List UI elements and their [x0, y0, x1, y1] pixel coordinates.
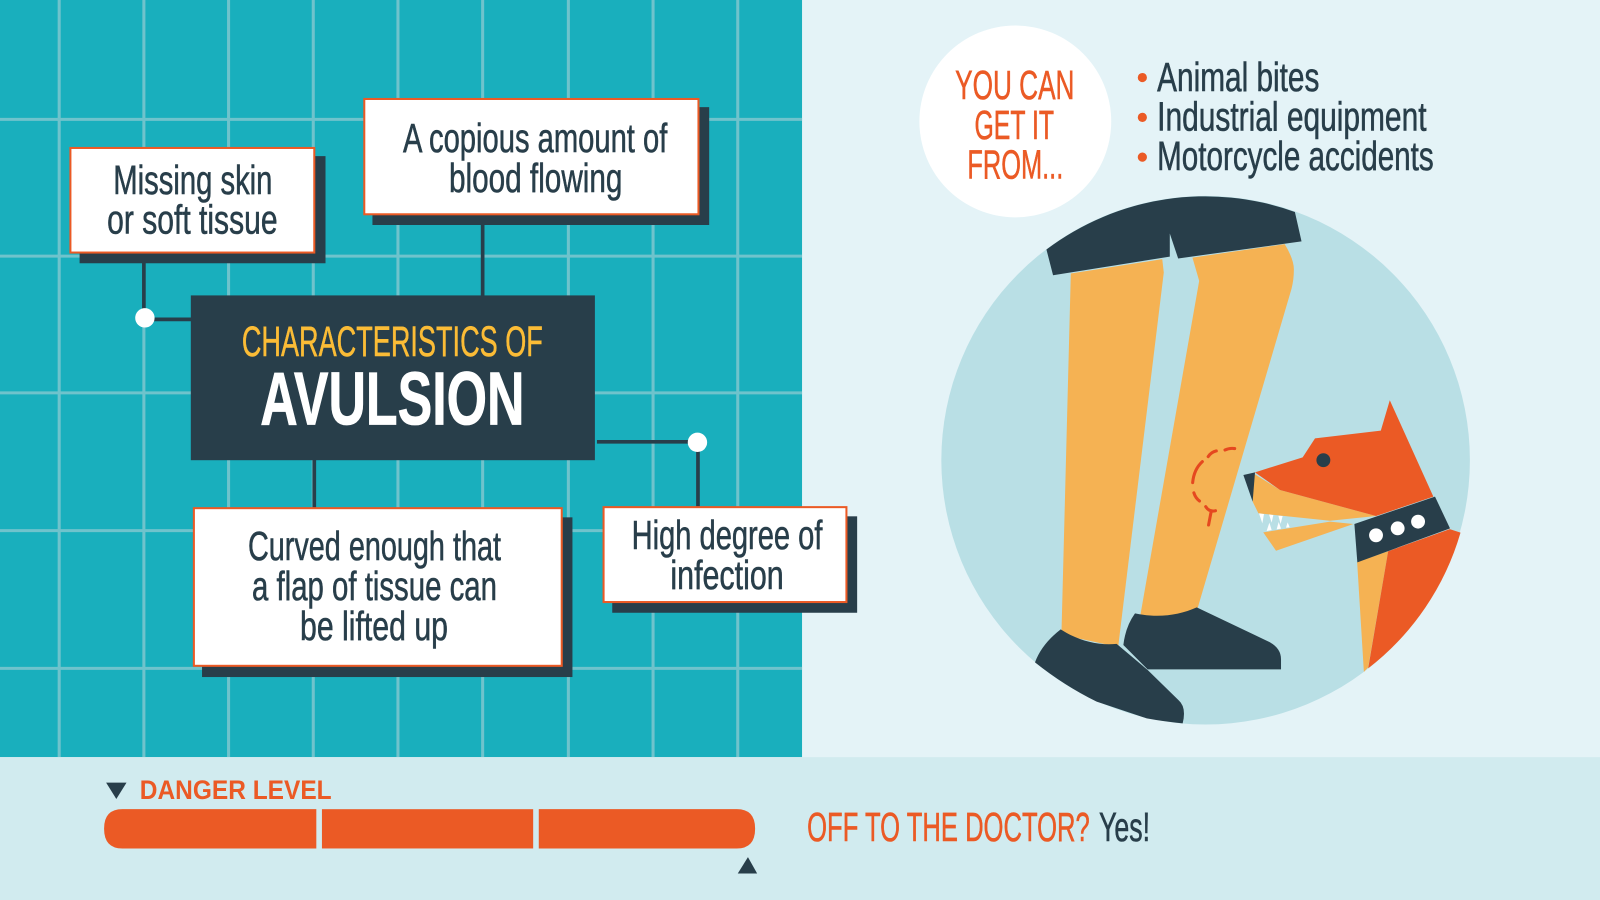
callout: curved flap: be lifted up — [300, 603, 448, 649]
callout: you can get it from: GET IT — [974, 102, 1054, 148]
callout: blood flowing: A copious amount of — [403, 115, 668, 161]
callout: you can get it from — [919, 26, 1111, 217]
callout: infection — [604, 507, 857, 613]
front leg — [1140, 244, 1294, 618]
doctor verdict: Yes! — [1099, 804, 1150, 850]
panel: danger level band — [0, 757, 1600, 900]
panel: characteristics grid background — [0, 0, 802, 757]
back leg — [1061, 259, 1164, 647]
dog nose — [1243, 472, 1255, 502]
title block: CHARACTERISTICS OF — [242, 318, 543, 366]
list of causes: Motorcycle accidents — [1157, 133, 1434, 179]
callout: blood flowing: blood flowing — [449, 155, 622, 201]
illustration: dog biting leg — [941, 196, 1470, 724]
callout: curved flap: Curved enough that — [248, 523, 501, 569]
wound — [1193, 448, 1235, 525]
dog teeth — [1259, 513, 1290, 531]
callout: blood flowing — [364, 99, 709, 225]
callout: infection: infection — [670, 552, 784, 598]
callout: infection: High degree of — [632, 512, 823, 558]
title block — [191, 295, 595, 460]
callout: curved flap: a flap of tissue can — [252, 563, 497, 609]
dog eye — [1316, 453, 1330, 467]
callout: you can get it from: FROM... — [967, 142, 1063, 188]
connector lines and nodes — [135, 219, 707, 510]
callout: curved flap — [194, 508, 572, 677]
front shoe — [1123, 607, 1281, 669]
danger level marker — [738, 857, 757, 873]
doctor verdict: OFF TO THE DOCTOR? — [807, 804, 1090, 850]
callout: you can get it from: YOU CAN — [955, 62, 1074, 108]
callout: missing skin — [70, 148, 326, 263]
danger level label: DANGER LEVEL — [140, 775, 332, 805]
dog lower jaw — [1263, 522, 1353, 551]
dog head — [1255, 400, 1433, 516]
list of causes: Industrial equipment — [1157, 94, 1427, 140]
right background panel — [802, 0, 1600, 757]
dog chest — [1357, 551, 1388, 672]
title block: AVULSION — [260, 357, 524, 441]
dog upper jaw — [1253, 473, 1376, 521]
danger level bar — [104, 809, 755, 848]
dog collar — [1354, 497, 1450, 562]
list of causes: Animal bites — [1157, 54, 1319, 100]
shorts — [1046, 196, 1302, 275]
callout: missing skin: or soft tissue — [107, 197, 278, 243]
callout: missing skin: Missing skin — [113, 157, 272, 203]
list of causes — [1138, 54, 1434, 179]
back shoe — [1035, 629, 1184, 723]
